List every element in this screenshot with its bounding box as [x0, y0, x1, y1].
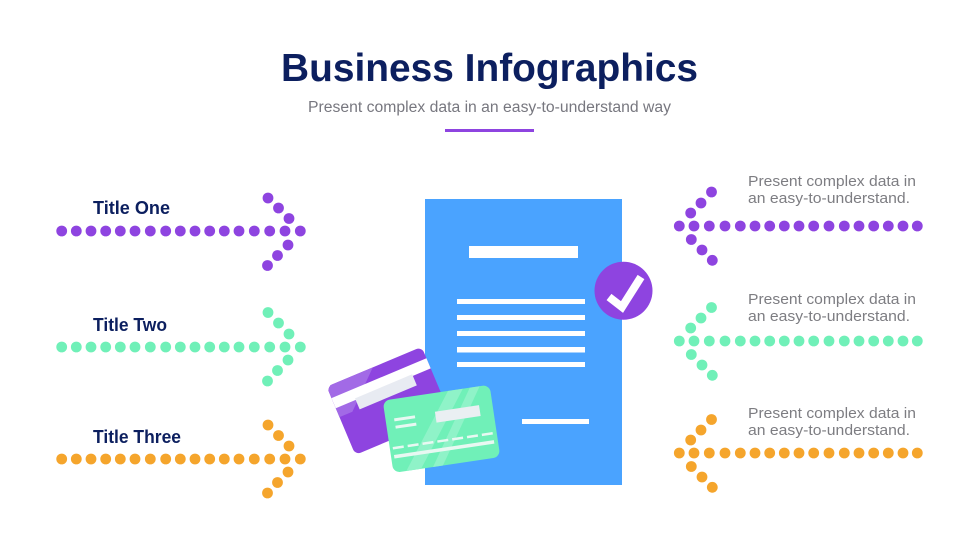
heading: Title One: Title One	[93, 198, 170, 218]
arrow: orange left	[56, 420, 306, 498]
title: Business Infographics	[281, 47, 698, 90]
subtitle: Present complex data in an easy-to-understand way	[308, 99, 671, 116]
icon: purple credit card	[327, 347, 450, 455]
arrow: orange right	[674, 414, 923, 493]
icon: check badge	[594, 262, 652, 320]
text block: right three: an easy-to-understand.	[748, 422, 910, 439]
heading: Title Two: Title Two	[93, 315, 167, 335]
title underline	[445, 129, 534, 132]
arrow: green left	[56, 307, 306, 386]
arrow: purple right	[674, 187, 923, 266]
text block: right one: Present complex data in	[748, 173, 916, 190]
text block: right three	[748, 405, 916, 439]
text block: right three: Present complex data in	[748, 405, 916, 422]
text block: right one	[748, 173, 916, 207]
text block: right two: Present complex data in	[748, 291, 916, 308]
document	[425, 199, 622, 485]
text block: right one: an easy-to-understand.	[748, 190, 910, 207]
text block: right two	[748, 291, 916, 325]
arrow: purple left	[56, 193, 306, 271]
icon: green credit card	[383, 385, 500, 473]
arrow: green right	[674, 302, 923, 381]
heading: Title Three: Title Three	[93, 427, 181, 447]
text block: right two: an easy-to-understand.	[748, 308, 910, 325]
